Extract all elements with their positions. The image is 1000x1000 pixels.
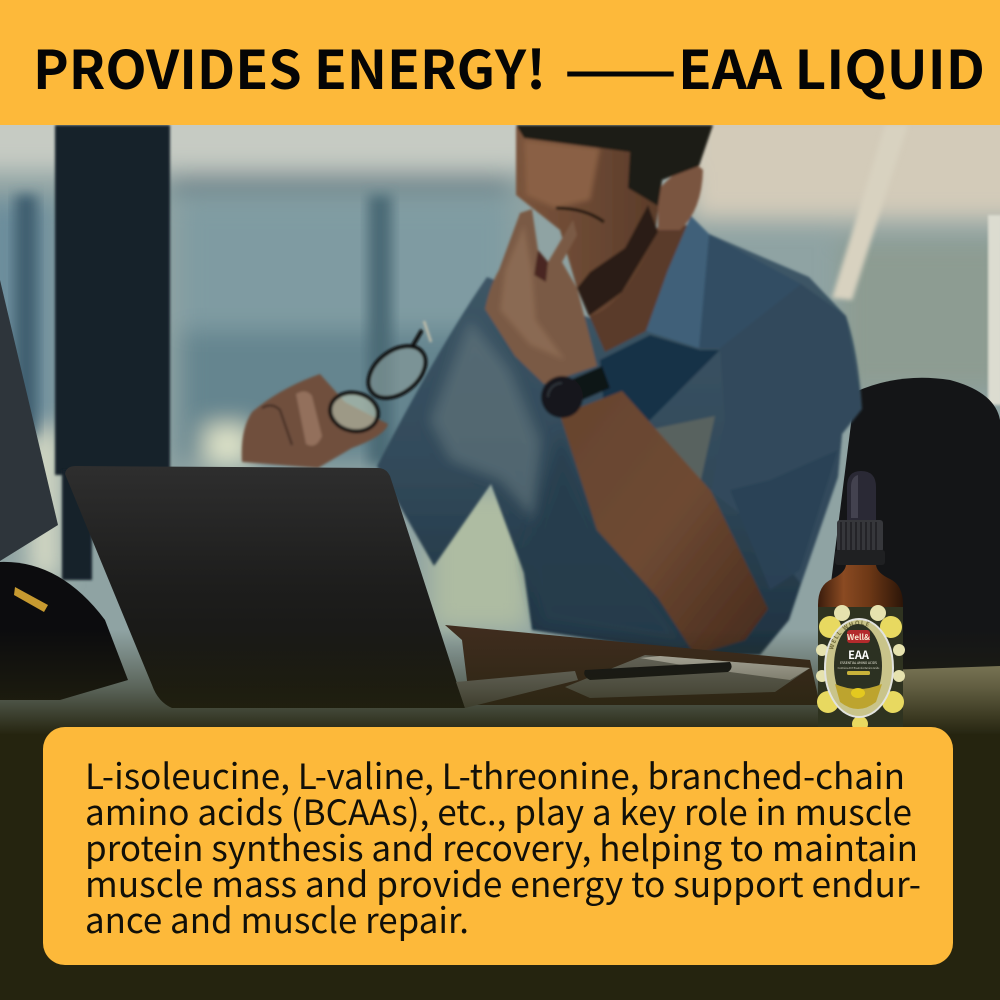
beard (577, 205, 658, 316)
hand at face (485, 209, 597, 384)
dropper bulb (847, 471, 876, 520)
product bottle (816, 471, 905, 727)
face (516, 127, 662, 316)
chest shadow (600, 335, 720, 430)
header band (0, 0, 1000, 125)
shirt left highlight (430, 320, 540, 520)
body text: amino acids (BCAAs), etc., play a key role in muscle (85, 785, 912, 836)
desk (445, 625, 820, 705)
body text: L-isoleucine, L-valine, L-threonine, branched-chain (85, 749, 905, 800)
hair (516, 125, 713, 206)
right sleeve (711, 284, 862, 584)
watch (541, 366, 610, 418)
laptop base (456, 671, 578, 708)
label (816, 605, 905, 727)
title: PROVIDES ENERGY! (33, 29, 546, 105)
left hand (242, 374, 388, 468)
collar (646, 216, 709, 348)
body text (85, 749, 921, 944)
label: Contains All 9 Essential Amino Acids (838, 666, 880, 670)
title: —— (564, 29, 677, 105)
label: Well& (847, 632, 870, 643)
title (33, 29, 985, 105)
chair (820, 378, 1000, 680)
notebook and pen (565, 655, 810, 698)
neck (589, 225, 690, 352)
pocket (638, 416, 715, 484)
laptop (65, 466, 465, 708)
shirt lower shading (525, 430, 695, 650)
eye crease (556, 208, 604, 222)
shirt (377, 234, 862, 655)
body text: muscle mass and provide energy to support endur- (85, 857, 921, 908)
body text: ance and muscle repair. (85, 893, 469, 944)
text panel (43, 727, 953, 965)
amber glass (818, 565, 903, 727)
label: WELL WHOLE (828, 620, 870, 650)
label: ESSENTIAL AMINO ACIDS (840, 660, 877, 665)
fingers shading (534, 250, 548, 282)
blurred office background (0, 100, 1000, 630)
glasses (327, 321, 435, 436)
forehead highlight (524, 140, 600, 208)
right forearm (560, 391, 768, 655)
monitor (0, 280, 58, 561)
bottle cap (835, 520, 885, 565)
dark bottom fade (0, 630, 1000, 735)
title: EAA LIQUID (678, 29, 985, 105)
shoulder panel (699, 234, 801, 348)
label: EAA (848, 647, 870, 663)
body text: protein synthesis and recovery, helping to maintain (85, 821, 918, 872)
headset (0, 562, 128, 700)
ear (658, 166, 703, 230)
